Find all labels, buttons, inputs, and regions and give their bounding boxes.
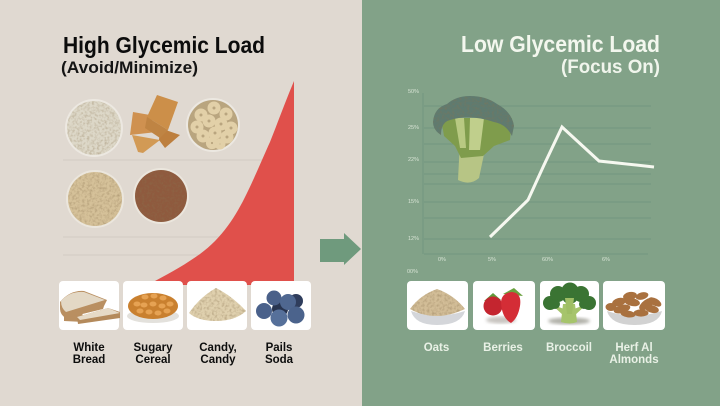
y axis labels: 60% [542,257,553,263]
card: berries [473,281,535,330]
y axis labels: 15% [408,199,419,205]
line chart: low glycemic response [407,89,654,275]
card: almonds [603,281,665,330]
card: broccoli [540,281,599,330]
card: white bread [59,281,120,330]
label: herf al: Herf Al [615,342,653,354]
food: brown grain bowl [133,168,189,224]
heading: low glycemic load: (Focus On) [561,57,660,78]
label: pails: Pails [266,342,292,354]
card: candy oat pile [187,281,247,330]
panel: high glycemic load background [0,0,362,406]
y axis labels: 5% [488,257,496,263]
y axis labels: 6% [602,257,610,263]
label: cereal: Cereal [135,354,171,366]
card: sugary cereal [123,281,183,330]
y axis labels: 0% [438,257,446,263]
heading: high glycemic load: High Glycemic Load [63,32,265,58]
icon: large broccoli [433,96,514,183]
label: candy: Candy, [199,342,237,354]
food: crackers [130,95,180,153]
label: soda: Soda [265,354,294,366]
heading: high glycemic load [61,32,265,77]
card: oats [407,281,468,330]
food: white rice bowl [65,99,123,157]
y axis labels: 12% [408,236,419,242]
heading: low glycemic load: Low Glycemic Load [461,31,660,57]
label: broccoli: Broccoil [546,342,592,354]
label: almonds: Almonds [609,354,659,366]
heading: low glycemic load [461,31,660,78]
panel: low glycemic load background [362,0,720,406]
y axis labels: 22% [408,157,419,163]
left chart gridlines [63,160,262,255]
y axis labels [407,89,610,275]
red rising high glycemic curve [155,81,294,285]
arrow: high to low [320,233,361,265]
heading: high glycemic load: (Avoid/Minimize) [61,59,198,77]
food: ring cereal bowl [186,98,240,152]
y axis labels: 25% [408,125,419,131]
card: blueberries [251,281,311,330]
label: bread: Bread [73,354,105,366]
label: berries: Berries [483,342,523,354]
label: white bread: White [73,342,105,354]
y axis labels: 00% [407,269,418,275]
label: sugary: Sugary [134,342,173,354]
food: oat flakes bowl [66,170,124,228]
y axis labels: 50% [408,89,419,95]
label: oats: Oats [424,342,449,354]
label: candy second line: Candy [200,354,236,366]
